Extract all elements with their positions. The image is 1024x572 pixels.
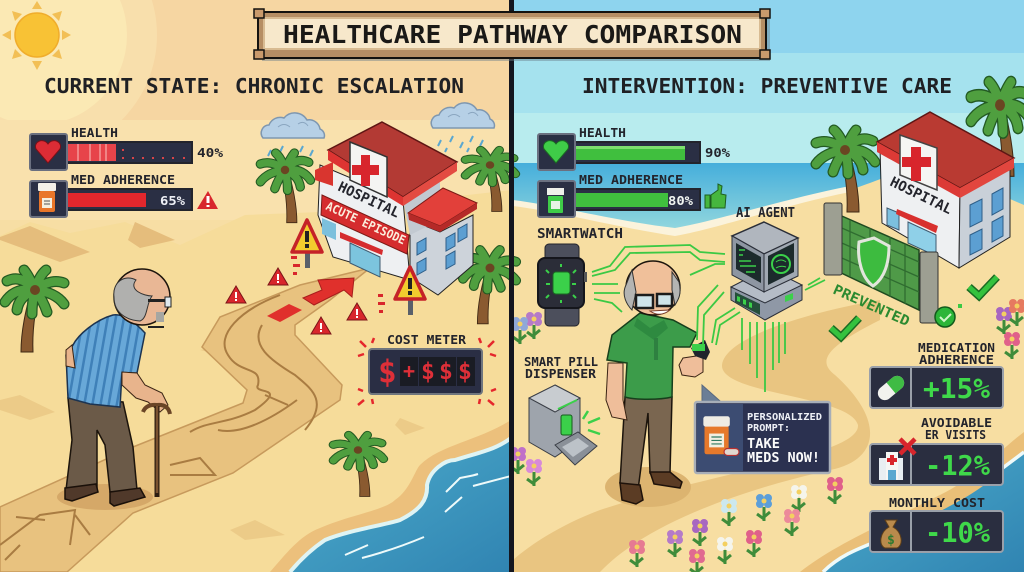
- metric: monthly cost: -10%: [925, 516, 990, 549]
- callout: personalized prompt: MEDS NOW!: [747, 451, 820, 466]
- winding path: [513, 300, 880, 572]
- sign: [350, 142, 387, 197]
- panel: intervention background: [513, 0, 1024, 572]
- label: smart pill dispenser: DISPENSER: [525, 366, 596, 381]
- hospital: prevented: [877, 112, 1014, 268]
- ocean bottom: [800, 432, 1024, 572]
- roof: [328, 122, 457, 197]
- icon: smartwatch: [538, 244, 587, 326]
- icon: warning signs: [292, 220, 425, 315]
- metric: medication adherence: +15%: [923, 372, 990, 405]
- icon: capsule: [875, 373, 907, 403]
- status: health left: [30, 126, 224, 170]
- icon: shield: [859, 238, 889, 286]
- label: smart pill dispenser: [524, 354, 598, 381]
- hospital label: HOSPITAL: [335, 179, 402, 222]
- status: health right: [538, 126, 731, 170]
- callout: personalized prompt: TAKE: [747, 437, 780, 452]
- label: ai agent: AI AGENT: [736, 206, 795, 221]
- metric: avoidable er visits: ER VISITS: [925, 427, 986, 442]
- label: smartwatch: SMARTWATCH: [537, 227, 623, 242]
- status: med adherence left: 65%: [160, 194, 186, 208]
- arrow: escalation: [267, 278, 354, 322]
- ocean: [290, 438, 511, 572]
- cost meter: $: [439, 359, 453, 385]
- center divider: [509, 0, 514, 572]
- status: health right: 90%: [705, 146, 731, 160]
- status: med adherence right: 80%: [668, 194, 694, 208]
- metric: avoidable er visits: [870, 415, 1003, 485]
- label: smart pill dispenser: SMART PILL: [524, 354, 598, 369]
- cost meter: [358, 333, 496, 405]
- cost meter: COST METER: [387, 333, 467, 347]
- callout: personalized prompt: PERSONALIZED: [747, 412, 822, 423]
- icon: hospital crossed: [879, 439, 915, 480]
- metric: medication adherence: [870, 340, 1003, 408]
- panel: current state background: [0, 0, 511, 572]
- wet sand: [270, 420, 511, 572]
- checks: [831, 277, 997, 337]
- metric: avoidable er visits: -12%: [925, 449, 990, 482]
- icon: small red warnings: [226, 256, 385, 334]
- sign: [900, 135, 937, 190]
- flowers: [510, 299, 1024, 572]
- winding road: [0, 268, 370, 572]
- icon: clouds with rain: [261, 103, 494, 162]
- banner: acute episode: ACUTE EPISODE: [324, 199, 408, 247]
- panel heading: intervention: INTERVENTION: PREVENTIVE CARE: [582, 74, 952, 98]
- hospital: acute episode: [315, 122, 477, 295]
- metric: monthly cost: [870, 495, 1003, 552]
- icon: smart pill dispenser: [529, 385, 600, 465]
- icon: sun: [2, 1, 71, 70]
- status: health left: 40%: [197, 146, 224, 160]
- callout: personalized prompt: PROMPT:: [747, 423, 790, 434]
- metric: avoidable er visits: AVOIDABLE: [921, 415, 992, 430]
- cost meter: $: [421, 359, 435, 385]
- hospital label: HOSPITAL: [887, 174, 954, 218]
- cost meter: +: [403, 359, 415, 383]
- status: health right: HEALTH: [579, 126, 626, 140]
- icon: ai agent computer: [731, 222, 802, 320]
- status: med adherence right: MED ADHERENCE: [579, 173, 683, 187]
- callout: personalized prompt: [695, 385, 830, 473]
- icon: money bag: $: [887, 533, 895, 548]
- metric: monthly cost: MONTHLY COST: [889, 495, 985, 510]
- green wall with shield: [824, 203, 938, 323]
- status: med adherence left: [30, 173, 218, 217]
- palm trees right: [816, 82, 1024, 212]
- figure: man with smartwatch: [605, 261, 710, 507]
- metric: medication adherence: MEDICATION: [918, 340, 995, 355]
- status: health left: HEALTH: [71, 126, 118, 140]
- panel heading: current state: CURRENT STATE: CHRONIC ESCALATION: [44, 74, 464, 98]
- label: prevented: PREVENTED: [830, 282, 912, 330]
- cost meter: $: [458, 359, 472, 385]
- title: HEALTHCARE PATHWAY COMPARISON: [283, 20, 742, 49]
- data lines: [592, 245, 825, 392]
- icon: pill bottle: [703, 416, 739, 455]
- status: med adherence left: MED ADHERENCE: [71, 173, 175, 187]
- status: med adherence right: [538, 173, 726, 217]
- cost meter: $: [378, 354, 397, 390]
- palm trees left: [5, 150, 516, 496]
- title plaque: [254, 9, 770, 61]
- figure: elderly man with cane: [57, 269, 171, 510]
- metric: medication adherence: ADHERENCE: [919, 352, 994, 367]
